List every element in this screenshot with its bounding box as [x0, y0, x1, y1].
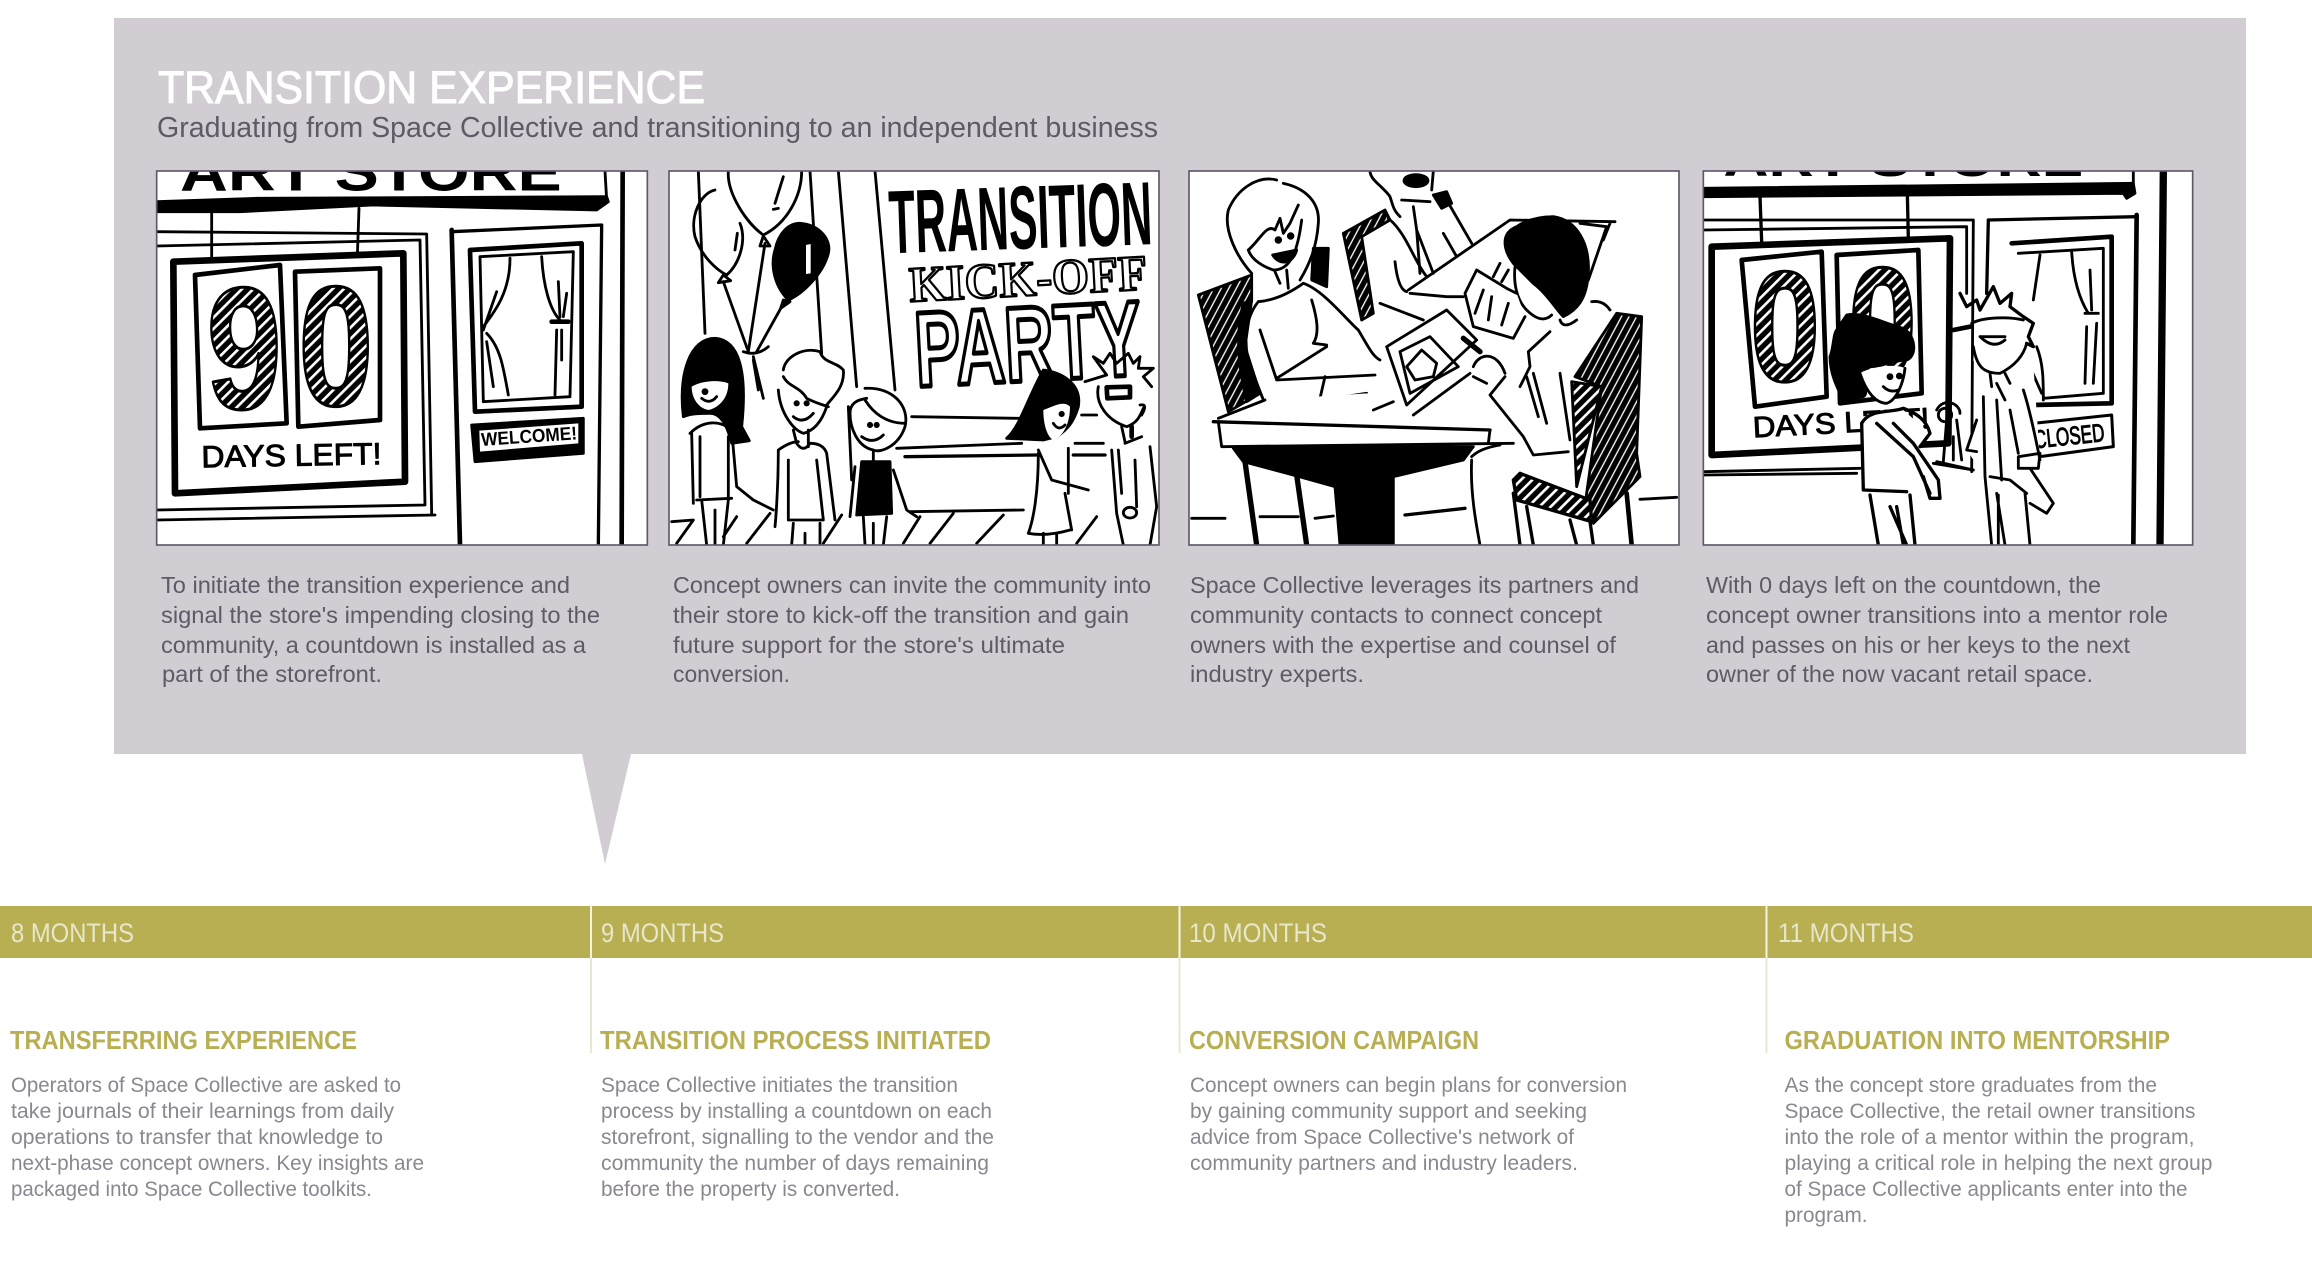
illustration: 00 days left, handing over keys: ART STORE: [1723, 131, 2083, 187]
column: conversion campaign: [1189, 1025, 1627, 1175]
body text: of Space Collective applicants enter into the: [1784, 1178, 2188, 1201]
illustration: 00 days left, handing over keys: [1703, 131, 2193, 545]
body text: operations to transfer that knowledge to: [11, 1126, 383, 1149]
body text: community partners and industry leaders.: [1190, 1152, 1578, 1175]
body text: community the number of days remaining: [601, 1152, 989, 1175]
panel: transition experience: [114, 18, 2246, 864]
body text: by gaining community support and seeking: [1190, 1100, 1587, 1123]
text block: kick-off party: Concept owners can invite the community into: [673, 572, 1151, 598]
body text: playing a critical role in helping the next group: [1784, 1152, 2212, 1175]
illustration: 00 days left, handing over keys: 0: [1750, 240, 1820, 415]
body text: advice from Space Collective's network of: [1190, 1126, 1574, 1149]
text block: partners: industry experts.: [1190, 661, 1364, 687]
text block: partners: community contacts to connect concept: [1190, 602, 1603, 628]
body text: As the concept store graduates from the: [1784, 1074, 2157, 1097]
illustration: 00 days left, handing over keys: CLOSED: [2033, 419, 2106, 454]
timeline band: [0, 906, 2312, 1053]
illustration: 90 days left countdown: [157, 141, 647, 545]
text block: mentor role: [1706, 572, 2168, 687]
text block: countdown: signal the store's impending closing to the: [161, 602, 600, 628]
heading: CONVERSION CAMPAIGN: [1189, 1025, 1479, 1055]
text block: partners: [1190, 572, 1639, 687]
panel: transition experience: TRANSITION: [887, 164, 1154, 273]
text block: countdown: [161, 572, 600, 687]
illustration: meeting with industry experts: [1189, 171, 1679, 545]
illustration: transition kick-off party: PARTY: [912, 278, 1144, 410]
body text: program.: [1784, 1204, 1868, 1227]
illustration: 90 days left countdown: 0: [298, 252, 373, 442]
title: TRANSITION EXPERIENCE: [158, 62, 705, 113]
label: 8 months: 8 MONTHS: [11, 918, 134, 948]
subtitle: Graduating from Space Collective and transitioning to an independent business: [157, 112, 1158, 144]
heading: GRADUATION INTO MENTORSHIP: [1784, 1025, 2170, 1055]
text block: mentor role: owner of the now vacant retail space.: [1706, 661, 2093, 687]
heading: TRANSFERRING EXPERIENCE: [10, 1025, 357, 1055]
body text: Space Collective initiates the transition: [601, 1074, 958, 1097]
body text: packaged into Space Collective toolkits.: [11, 1178, 372, 1201]
illustration: 00 days left, handing over keys: 0: [1848, 236, 1917, 411]
illustration: 90 days left countdown: 9: [207, 251, 282, 445]
text block: kick-off party: [673, 572, 1151, 687]
body text: before the property is converted.: [601, 1178, 900, 1201]
text block: mentor role: With 0 days left on the countdown, the: [1706, 572, 2101, 598]
heading: TRANSITION PROCESS INITIATED: [600, 1025, 991, 1055]
body text: [1784, 1074, 2212, 1227]
text block: countdown: part of the storefront.: [162, 661, 382, 687]
column: transition process initiated: [600, 1025, 994, 1201]
illustration: 90 days left countdown: ART STORE: [180, 141, 562, 203]
text block: kick-off party: conversion.: [673, 661, 790, 687]
text block: kick-off party: future support for the store's ultimate: [673, 632, 1065, 658]
body text: into the role of a mentor within the program,: [1784, 1126, 2194, 1149]
body text: [11, 1074, 424, 1201]
column: graduation into mentorship: [1784, 1025, 2212, 1227]
illustration: 00 days left, handing over keys: DAYS LEFT!: [1752, 402, 1930, 444]
text block: mentor role: concept owner transitions into a mentor role: [1706, 602, 2168, 628]
body text: Operators of Space Collective are asked to: [11, 1074, 401, 1097]
label: 9 months: 9 MONTHS: [601, 918, 724, 948]
body text: Space Collective, the retail owner transitions: [1784, 1100, 2196, 1123]
body text: [1190, 1074, 1627, 1175]
label: 10 months: 10 MONTHS: [1189, 918, 1327, 948]
body text: process by installing a countdown on each: [601, 1100, 992, 1123]
text block: countdown: To initiate the transition experience and: [161, 572, 570, 598]
text block: partners: owners with the expertise and counsel of: [1190, 632, 1617, 658]
body text: Concept owners can begin plans for conversion: [1190, 1074, 1627, 1097]
text block: countdown: community, a countdown is installed as a: [161, 632, 586, 658]
text block: mentor role: and passes on his or her keys to the next: [1706, 632, 2131, 658]
illustration: 90 days left countdown: WELCOME!: [480, 422, 578, 450]
illustration: 90 days left countdown: DAYS LEFT!: [201, 437, 382, 474]
column: transferring experience: [10, 1025, 424, 1201]
label: 11 months: 11 MONTHS: [1778, 918, 1914, 948]
body text: take journals of their learnings from daily: [11, 1100, 395, 1123]
body text: storefront, signalling to the vendor and the: [601, 1126, 994, 1149]
illustration: transition kick-off party: KICK-OFF: [908, 244, 1149, 313]
body text: next-phase concept owners. Key insights are: [11, 1152, 424, 1175]
illustration: transition kick-off party: [669, 164, 1159, 545]
text block: partners: Space Collective leverages its partners and: [1190, 572, 1639, 598]
text block: kick-off party: their store to kick-off the transition and gain: [673, 602, 1129, 628]
body text: [601, 1074, 994, 1201]
